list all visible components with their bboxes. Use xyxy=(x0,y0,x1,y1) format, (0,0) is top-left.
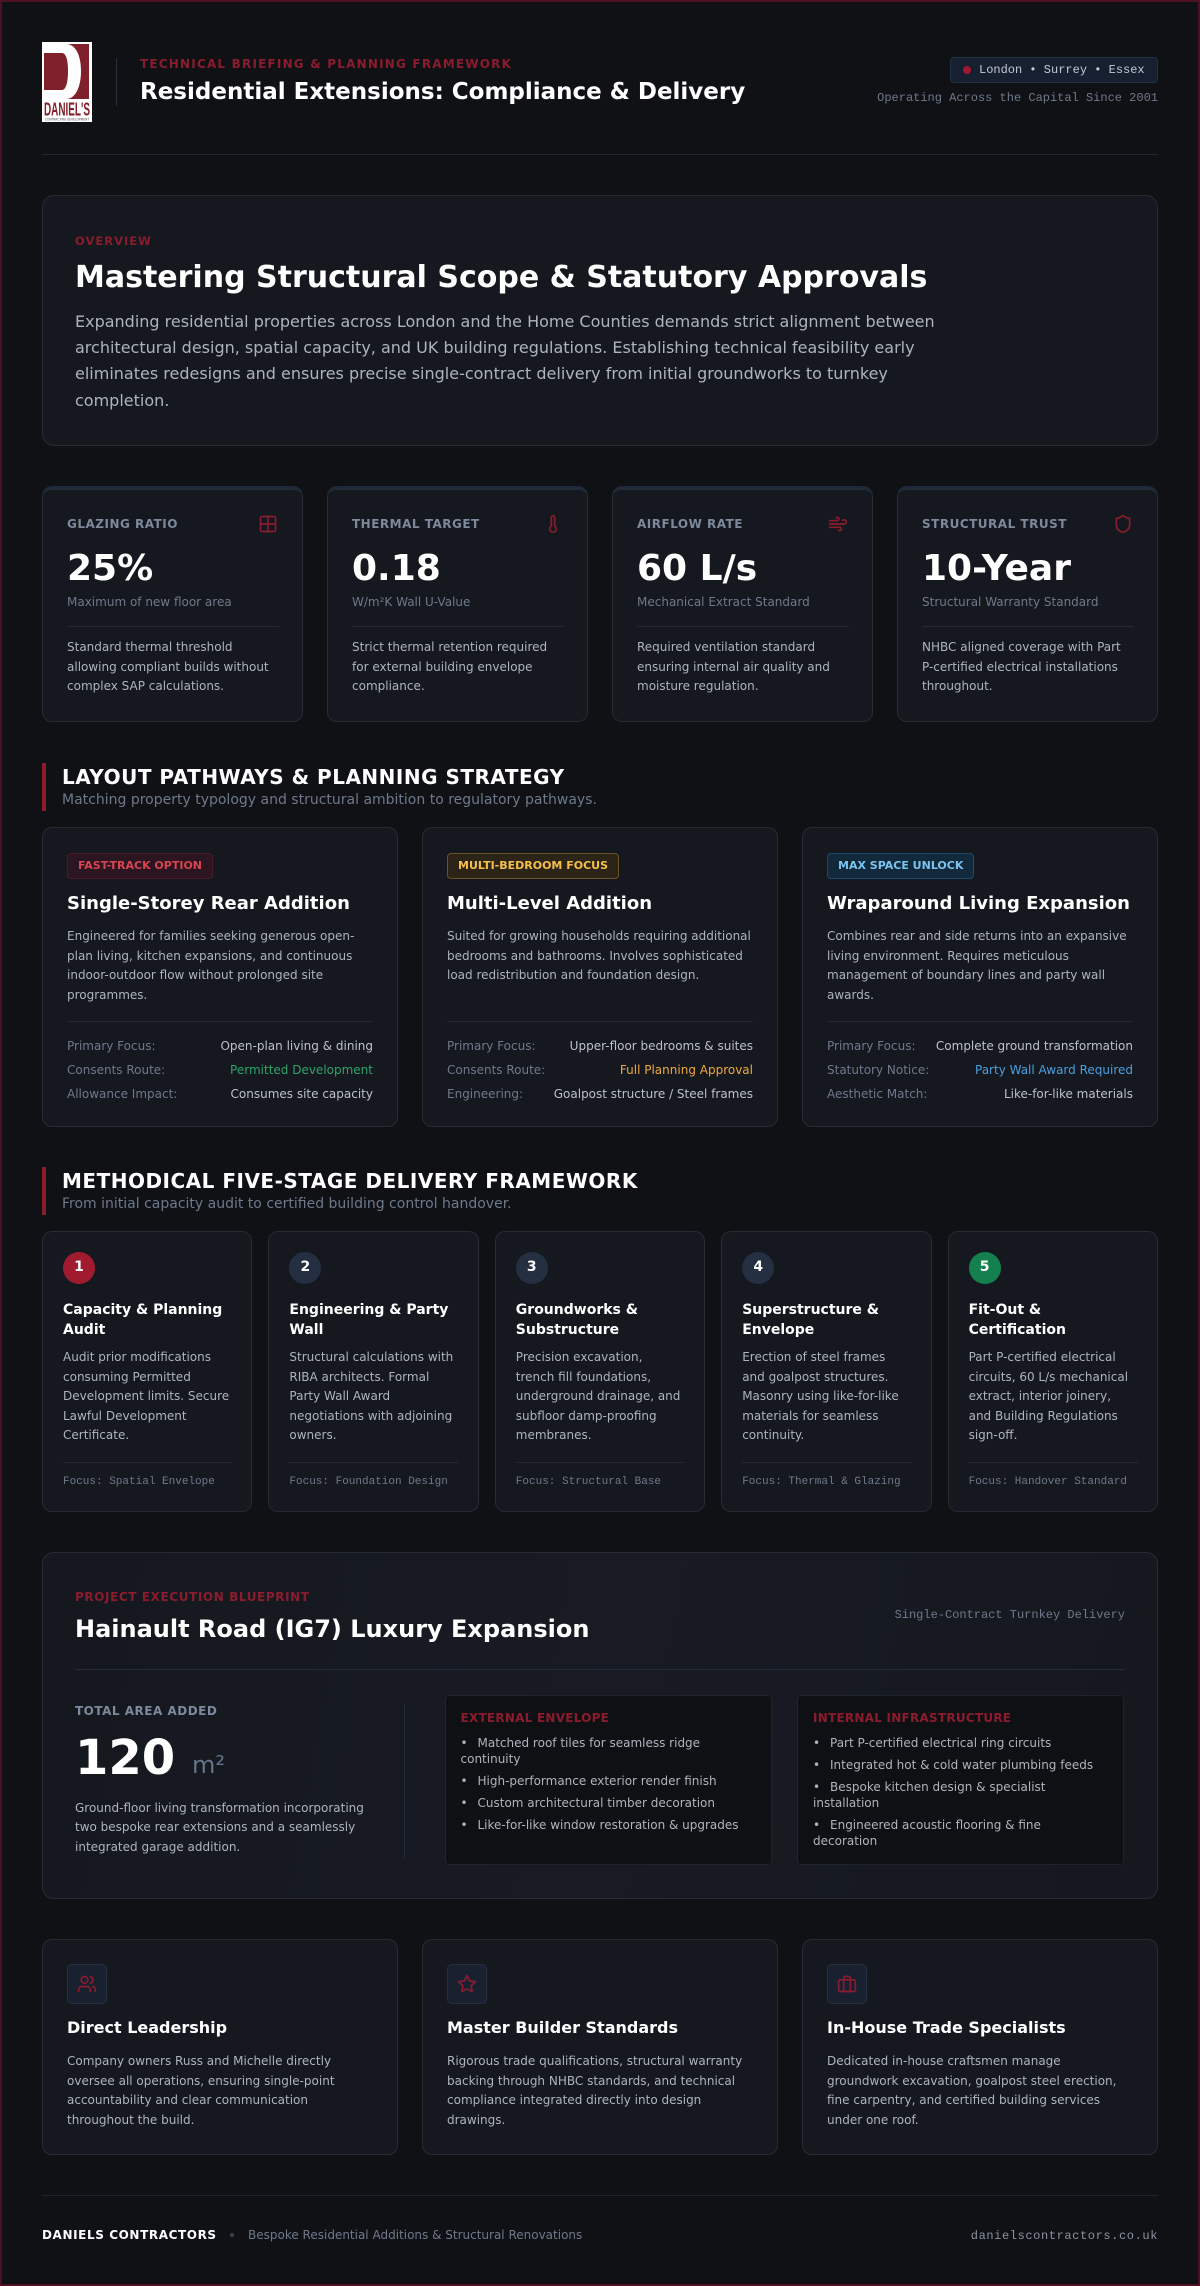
panel: internal infrastructure: decoration xyxy=(813,1834,877,1848)
spec rows: Primary Focus: xyxy=(827,1039,916,1053)
panel: in-house trade specialists: fine carpentry, and certified building services xyxy=(827,2093,1100,2107)
stage 2 xyxy=(268,1231,479,1512)
stage 1: consuming Permitted xyxy=(63,1370,191,1384)
tag: multi-bedroom xyxy=(447,853,619,879)
stage 2: RIBA architects. Formal xyxy=(289,1370,429,1384)
panel: external envelope: Like-for-like window restoration & upgrades xyxy=(478,1818,739,1832)
panel: external envelope: • xyxy=(460,1818,468,1832)
stat card: structural trust: P-certified electrical installations xyxy=(922,660,1118,674)
panel: direct leadership: Company owners Russ and Michelle directly xyxy=(67,2054,331,2068)
stat card: thermal target: Strict thermal retention required xyxy=(352,640,547,654)
stage 4: Envelope xyxy=(742,1322,814,1338)
section heading: layout pathways: Matching property typology and structural ambition to regulatory pathways. xyxy=(62,792,597,808)
icon: wind xyxy=(828,516,848,532)
panel: external envelope: continuity xyxy=(460,1752,520,1766)
stat card: thermal target: 0.18 xyxy=(352,548,441,589)
stat card: thermal target: THERMAL TARGET xyxy=(352,517,480,531)
panel: external envelope: EXTERNAL ENVELOPE xyxy=(460,1711,609,1725)
tag: fast-track xyxy=(67,853,213,879)
stage 4: Masonry using like-for-like xyxy=(742,1389,899,1403)
panel: multi-level addition: Multi-Level Addition xyxy=(447,893,652,914)
panel: external envelope: • xyxy=(460,1774,468,1788)
overview text: Expanding residential properties across London and the Home Counties demands strict alignment between xyxy=(75,312,935,331)
stage 2: Focus: Foundation Design xyxy=(289,1476,448,1488)
spec rows: Permitted Development xyxy=(230,1063,373,1077)
footer tagline: Bespoke Residential Additions & Structural Renovations xyxy=(248,2228,582,2242)
section heading: five-stage framework: From initial capacity audit to certified building control handover. xyxy=(62,1196,512,1212)
panel: master builder standards: compliance integrated directly into design xyxy=(447,2093,701,2107)
icon: star xyxy=(447,1964,487,2004)
stage 2: Engineering & Party xyxy=(289,1302,448,1318)
panel: direct leadership: throughout the build. xyxy=(67,2112,194,2126)
stage 3: Focus: Structural Base xyxy=(516,1476,661,1488)
panel: wraparound living expansion: Wraparound Living Expansion xyxy=(827,893,1130,914)
spec rows xyxy=(67,1039,373,1101)
spec rows: Full Planning Approval xyxy=(620,1063,753,1077)
page title: Residential Extensions: Compliance & Delivery xyxy=(140,79,745,105)
stage 2: Structural calculations with xyxy=(289,1350,453,1364)
total area metric: Ground-floor living transformation incorporating xyxy=(75,1800,364,1814)
logo xyxy=(42,42,92,122)
overview text: eliminates redesigns and ensures precise single-contract delivery from initial groundworks to turnkey xyxy=(75,364,888,383)
stage 5: Focus: Handover Standard xyxy=(969,1476,1127,1488)
stat card: airflow rate: moisture regulation. xyxy=(637,679,759,693)
panel: master builder standards: drawings. xyxy=(447,2112,505,2126)
footer xyxy=(42,2195,1158,2243)
icon: shield xyxy=(1116,514,1130,534)
panel: in-house trade specialists: In-House Trade Specialists xyxy=(827,2018,1066,2037)
stat card: airflow rate: Required ventilation standard xyxy=(637,640,815,654)
panel: overview xyxy=(42,195,1158,446)
panel: in-house trade specialists: groundwork excavation, goalpost steel erection, xyxy=(827,2074,1116,2088)
panel: single-storey rear addition: plan living, kitchen expansions, and continuous xyxy=(67,948,352,962)
panel: internal infrastructure: • xyxy=(813,1780,820,1794)
stage 2: 2 xyxy=(301,1259,310,1275)
spec rows: Primary Focus: xyxy=(67,1039,156,1053)
stat card: structural trust xyxy=(897,486,1158,722)
panel: external envelope: • xyxy=(460,1736,468,1750)
logo: CONTRACTING DEVELOPMENT xyxy=(45,118,89,122)
spec rows: Primary Focus: xyxy=(447,1039,536,1053)
stat card: structural trust: 10-Year xyxy=(922,548,1071,589)
panel: single-storey rear addition: Engineered for families seeking generous open- xyxy=(67,929,354,943)
stage 2: Wall xyxy=(289,1322,323,1338)
tag: multi-bedroom: MULTI-BEDROOM FOCUS xyxy=(458,859,608,872)
overview text: completion. xyxy=(75,391,169,410)
icon: briefcase xyxy=(827,1964,867,2004)
stat card: glazing ratio: Maximum of new floor area xyxy=(67,595,232,609)
header: logo, briefing title and service area xyxy=(42,42,1158,155)
spec rows: Complete ground transformation xyxy=(936,1039,1133,1053)
overview text xyxy=(75,312,935,410)
stat card: airflow rate: 60 L/s xyxy=(637,548,757,589)
tag: fast-track: FAST-TRACK OPTION xyxy=(78,859,202,872)
stat card: glazing ratio: complex SAP calculations. xyxy=(67,679,224,693)
overview text: architectural design, spatial capacity, and UK building regulations. Establishing technical feasibility early xyxy=(75,338,915,357)
panel: external envelope: Custom architectural timber decoration xyxy=(478,1796,715,1810)
stat card: thermal target: W/m²K Wall U-Value xyxy=(352,595,470,609)
stat card: structural trust: STRUCTURAL TRUST xyxy=(922,517,1067,531)
stage 5: 5 xyxy=(980,1259,989,1275)
stage 1: Certificate. xyxy=(63,1428,129,1442)
spec rows: Engineering: xyxy=(447,1087,523,1101)
panel: master builder standards xyxy=(422,1939,778,2155)
section heading: layout pathways xyxy=(42,763,597,811)
panel: wraparound living expansion: awards. xyxy=(827,988,874,1002)
stage 1: Capacity & Planning xyxy=(63,1302,222,1318)
stat card: thermal target: compliance. xyxy=(352,679,425,693)
panel: single-storey rear addition: Single-Storey Rear Addition xyxy=(67,893,350,914)
stage 1: 1 xyxy=(74,1259,84,1275)
delivery note: Single-Contract Turnkey Delivery xyxy=(895,1608,1125,1622)
panel: direct leadership: oversee all operations, ensuring single-point xyxy=(67,2074,335,2088)
panel: in-house trade specialists: Dedicated in-house craftsmen manage xyxy=(827,2054,1061,2068)
stage 5: extract, interior joinery, xyxy=(969,1389,1111,1403)
panel: internal infrastructure: • xyxy=(813,1818,820,1832)
stat card: airflow rate: Mechanical Extract Standard xyxy=(637,595,810,609)
stage 5: sign-off. xyxy=(969,1428,1017,1442)
footer url: danielscontractors.co.uk xyxy=(971,2229,1158,2243)
stage 5: Fit-Out & xyxy=(969,1302,1041,1318)
stage 1 xyxy=(42,1231,252,1512)
panel: multi-level addition: Suited for growing households requiring additional xyxy=(447,929,751,943)
panel: multi-level addition xyxy=(422,827,778,1127)
stage 4: Superstructure & xyxy=(742,1302,879,1318)
stat card: thermal target: for external building envelope xyxy=(352,660,533,674)
panel: direct leadership: Direct Leadership xyxy=(67,2018,227,2037)
stage 4: continuity. xyxy=(742,1428,804,1442)
stat card: airflow rate: AIRFLOW RATE xyxy=(637,517,743,531)
panel: single-storey rear addition: programmes. xyxy=(67,988,147,1002)
stage 1: Audit xyxy=(63,1322,105,1338)
panel: external envelope xyxy=(444,1695,772,1865)
stage 3: trench fill foundations, xyxy=(516,1370,651,1384)
stage 3: Precision excavation, xyxy=(516,1350,642,1364)
spec rows: Goalpost structure / Steel frames xyxy=(554,1087,753,1101)
panel: direct leadership xyxy=(42,1939,398,2155)
stat card: thermal target xyxy=(327,486,588,722)
spec rows xyxy=(447,1039,753,1101)
spec rows: Aesthetic Match: xyxy=(827,1087,927,1101)
spec rows: Statutory Notice: xyxy=(827,1063,929,1077)
stage 4: Focus: Thermal & Glazing xyxy=(742,1476,901,1488)
panel: master builder standards: backing through NHBC standards, and technical xyxy=(447,2074,735,2088)
spec rows: Allowance Impact: xyxy=(67,1087,177,1101)
stage 2: owners. xyxy=(289,1428,337,1442)
stage 4: materials for seamless xyxy=(742,1408,879,1422)
overview label: OVERVIEW xyxy=(75,234,152,248)
stage 1: Lawful Development xyxy=(63,1408,187,1422)
stat card: structural trust: throughout. xyxy=(922,679,993,693)
panel: in-house trade specialists xyxy=(802,1939,1158,2155)
stage 5 xyxy=(948,1231,1158,1512)
spec rows: Party Wall Award Required xyxy=(975,1063,1133,1077)
total area metric: two bespoke rear extensions and a seamlessly xyxy=(75,1820,355,1834)
panel: wraparound living expansion: living environment. Requires meticulous xyxy=(827,948,1069,962)
total area metric: TOTAL AREA ADDED xyxy=(75,1704,217,1718)
stat card: glazing ratio: GLAZING RATIO xyxy=(67,517,178,531)
total area metric: m² xyxy=(192,1751,225,1779)
panel: external envelope: • xyxy=(460,1796,468,1810)
stat card: airflow rate xyxy=(612,486,873,722)
icon: users xyxy=(67,1964,107,2004)
tag: max space xyxy=(827,853,974,879)
panel: in-house trade specialists: under one roof. xyxy=(827,2112,919,2126)
panel: single-storey rear addition xyxy=(42,827,398,1127)
panel: internal infrastructure: Engineered acoustic flooring & fine xyxy=(830,1818,1041,1832)
panel: master builder standards: Rigorous trade qualifications, structural warranty xyxy=(447,2054,742,2068)
stage 3: membranes. xyxy=(516,1428,592,1442)
stage 3: 3 xyxy=(527,1259,537,1275)
panel: project execution blueprint xyxy=(42,1552,1158,1899)
footer brand: DANIELS CONTRACTORS xyxy=(42,2228,217,2242)
panel: direct leadership: accountability and clear communication xyxy=(67,2093,308,2107)
stat card: airflow rate: ensuring internal air quality and xyxy=(637,660,830,674)
panel: wraparound living expansion xyxy=(802,827,1158,1127)
stat card: glazing ratio: allowing compliant builds without xyxy=(67,660,269,674)
spec rows: Consents Route: xyxy=(447,1063,545,1077)
panel: external envelope: Matched roof tiles for seamless ridge xyxy=(478,1736,700,1750)
panel: multi-level addition: bedrooms and bathrooms. Involves sophisticated xyxy=(447,948,743,962)
spec rows: Upper-floor bedrooms & suites xyxy=(570,1039,753,1053)
stage 3: Substructure xyxy=(516,1322,619,1338)
stat card: structural trust: Structural Warranty Standard xyxy=(922,595,1098,609)
stage 5: Part P-certified electrical xyxy=(969,1350,1116,1364)
stage 1: Focus: Spatial Envelope xyxy=(63,1476,215,1488)
stage 5: and Building Regulations xyxy=(969,1408,1118,1422)
panel: single-storey rear addition: indoor-outdoor flow without prolonged site xyxy=(67,968,323,982)
stage 5: Certification xyxy=(969,1322,1066,1338)
section heading: five-stage framework xyxy=(42,1167,638,1215)
total area metric xyxy=(75,1704,364,1854)
spec rows: Like-for-like materials xyxy=(1004,1087,1133,1101)
panel: wraparound living expansion: management of boundary lines and party wall xyxy=(827,968,1105,982)
stage 1: Audit prior modifications xyxy=(63,1350,211,1364)
project title: Hainault Road (IG7) Luxury Expansion xyxy=(75,1615,589,1643)
section heading: layout pathways: LAYOUT PATHWAYS & PLANNING STRATEGY xyxy=(62,765,565,789)
stage 2: negotiations with adjoining xyxy=(289,1408,452,1422)
section heading: five-stage framework: METHODICAL FIVE-STAGE DELIVERY FRAMEWORK xyxy=(62,1169,638,1193)
total area metric: 120 xyxy=(75,1730,175,1786)
panel: internal infrastructure: • xyxy=(813,1758,820,1772)
stat card: structural trust: NHBC aligned coverage with Part xyxy=(922,640,1121,654)
stage 4: and goalpost structures. xyxy=(742,1370,888,1384)
panel: internal infrastructure: INTERNAL INFRASTRUCTURE xyxy=(813,1711,1011,1725)
stage 1: Development limits. Secure xyxy=(63,1389,229,1403)
panel: wraparound living expansion: Combines rear and side returns into an expansive xyxy=(827,929,1127,943)
total area metric: integrated garage addition. xyxy=(75,1840,240,1854)
stat card: glazing ratio: Standard thermal threshold xyxy=(67,640,233,654)
panel: internal infrastructure: Integrated hot & cold water plumbing feeds xyxy=(830,1758,1093,1772)
panel: internal infrastructure: • xyxy=(813,1736,820,1750)
panel: internal infrastructure: Bespoke kitchen design & specialist xyxy=(830,1780,1046,1794)
icon: window grid xyxy=(260,516,276,532)
spec rows: Consumes site capacity xyxy=(231,1087,373,1101)
panel: external envelope: High-performance exterior render finish xyxy=(478,1774,717,1788)
project eyebrow: PROJECT EXECUTION BLUEPRINT xyxy=(75,1590,310,1604)
icon: thermometer xyxy=(548,514,558,534)
stage 3: Groundworks & xyxy=(516,1302,638,1318)
spec rows: Consents Route: xyxy=(67,1063,165,1077)
stage 3: underground drainage, and xyxy=(516,1389,680,1403)
panel: multi-level addition: load redistribution and foundation design. xyxy=(447,968,699,982)
stat card: glazing ratio xyxy=(42,486,303,722)
stage 4 xyxy=(721,1231,932,1512)
panel: internal infrastructure: installation xyxy=(813,1796,879,1810)
stage 4: 4 xyxy=(753,1259,763,1275)
stage 2: Party Wall Award xyxy=(289,1389,390,1403)
overview heading: Mastering Structural Scope & Statutory Approvals xyxy=(75,260,927,295)
location pill: London • Surrey • Essex xyxy=(979,63,1145,77)
stage 3: subfloor damp-proofing xyxy=(516,1408,657,1422)
location pill xyxy=(950,57,1158,83)
eyebrow: TECHNICAL BRIEFING & PLANNING FRAMEWORK xyxy=(140,57,512,71)
tag: max space: MAX SPACE UNLOCK xyxy=(838,859,963,872)
panel: master builder standards: Master Builder Standards xyxy=(447,2018,678,2037)
spec rows xyxy=(827,1039,1133,1101)
stage 5: circuits, 60 L/s mechanical xyxy=(969,1370,1128,1384)
panel: internal infrastructure: Part P-certified electrical ring circuits xyxy=(830,1736,1051,1750)
operating since note: Operating Across the Capital Since 2001 xyxy=(877,91,1158,105)
panel: internal infrastructure xyxy=(797,1695,1124,1865)
stat card: glazing ratio: 25% xyxy=(67,548,153,589)
stage 3 xyxy=(495,1231,705,1512)
spec rows: Open-plan living & dining xyxy=(220,1039,373,1053)
stage 4: Erection of steel frames xyxy=(742,1350,885,1364)
